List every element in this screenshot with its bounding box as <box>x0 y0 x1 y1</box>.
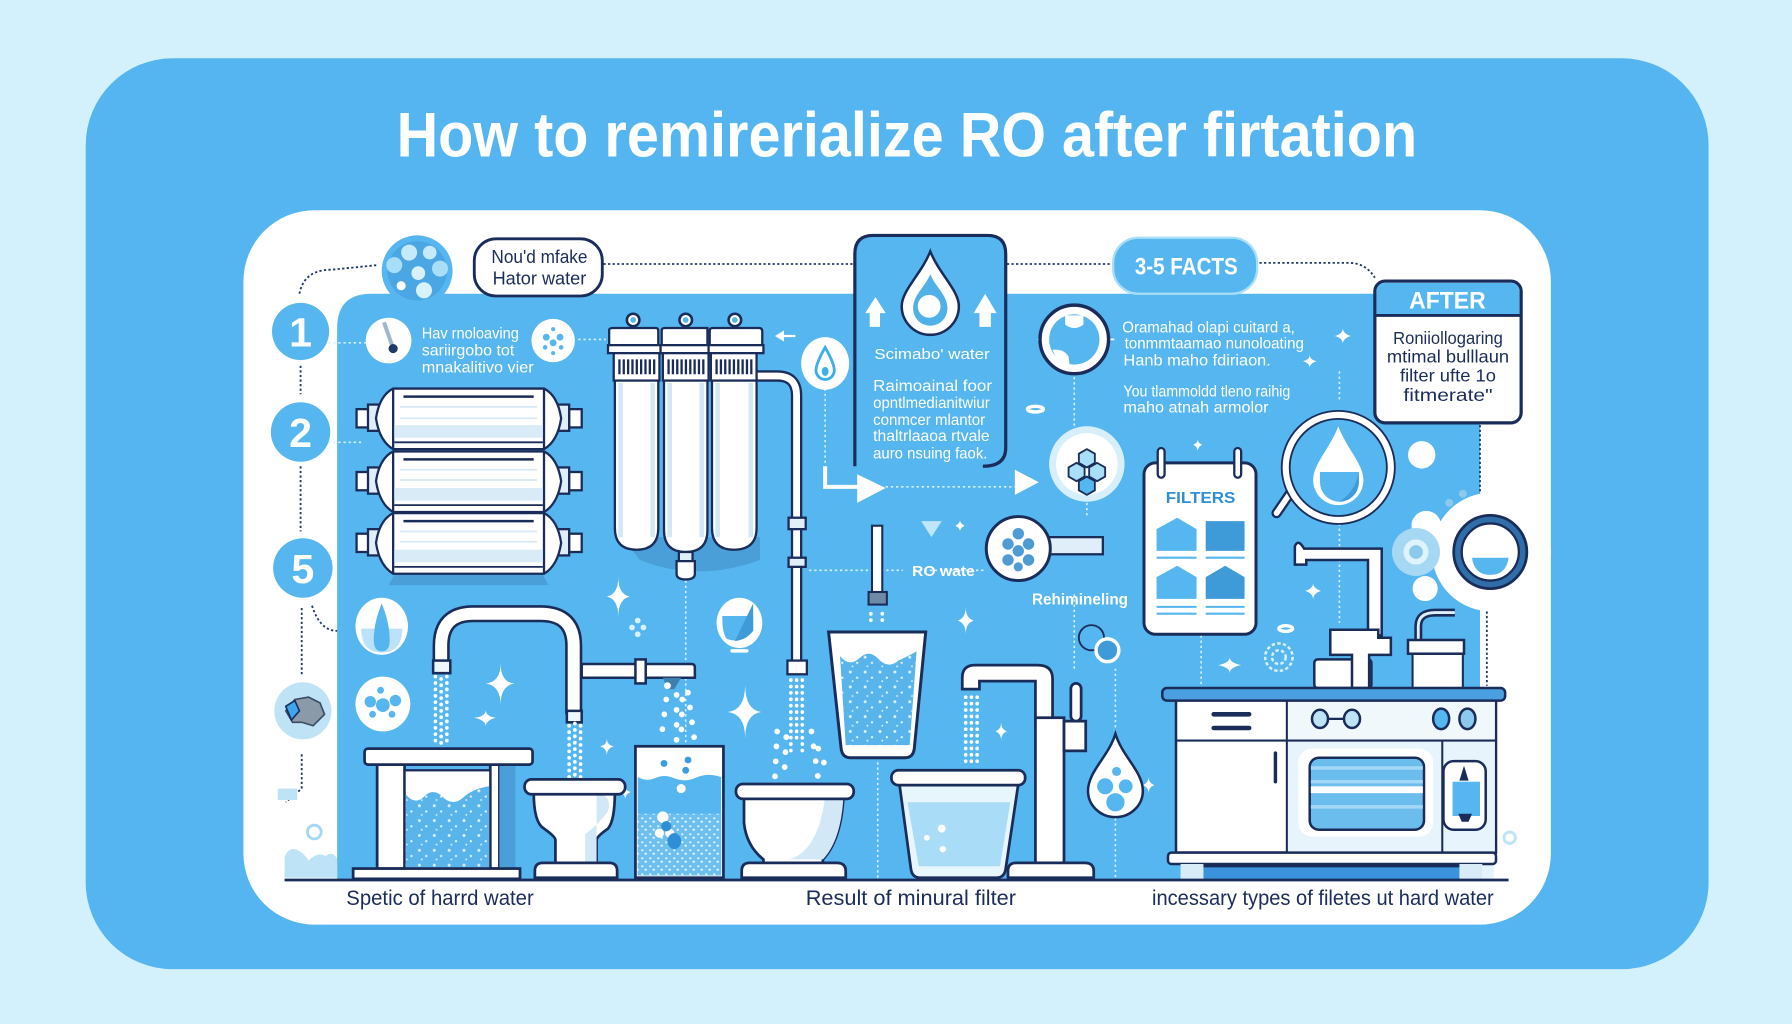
icon: small mineral specks <box>629 618 646 637</box>
captions <box>346 885 1494 910</box>
tall glass with minerals <box>635 746 723 878</box>
basin <box>891 770 1025 878</box>
icon: filter rod circle <box>986 517 1103 581</box>
icon: mineral dots circle <box>531 319 575 362</box>
callout pill: hard water: Nou'd mfake <box>491 246 587 267</box>
panel: remineralised water card: auro nsuing faok. <box>873 445 987 462</box>
text: fact block: Oramahad olapi cuitard a, <box>1122 320 1295 337</box>
misc small tokens <box>1027 406 1293 631</box>
icon: mineral beads <box>1079 625 1119 662</box>
panel: filters clipboard <box>1144 448 1256 634</box>
text: fact block: Hanb maho fdiriaon. <box>1123 353 1271 370</box>
text: intro note <box>422 325 534 377</box>
horizontal filter 3 <box>357 513 582 585</box>
panel: after callout <box>1375 281 1521 423</box>
kitchen jug <box>1408 613 1464 688</box>
label: remineralising: Rehimineling <box>1032 592 1128 609</box>
panel: after callout: AFTER <box>1409 288 1486 315</box>
dotted connector lines <box>286 263 1487 802</box>
faucet: basin mixer <box>962 665 1094 878</box>
pipe from cartridges <box>754 376 807 674</box>
right pale strip <box>1480 702 1494 880</box>
panel: after callout: filter ufte 1o <box>1400 366 1496 386</box>
icon: small tag <box>278 789 297 800</box>
icon: small ring <box>1504 832 1515 843</box>
icon: ring drop <box>307 825 321 839</box>
text: intro note: Hav rnoloaving <box>422 325 519 342</box>
step 1 badge <box>272 303 329 360</box>
step 5 badge <box>273 538 333 598</box>
step 5 badge: 5 <box>291 546 314 592</box>
text: fact block: maho atnah armolor <box>1123 400 1269 417</box>
decoration: corner waves <box>285 849 337 878</box>
icon: drop circle <box>801 337 849 390</box>
icon: mineral drop <box>1088 734 1143 817</box>
icon: glass orb <box>717 598 762 653</box>
icon: gauge bubble cluster <box>1392 441 1551 611</box>
horizontal filter 1 <box>357 389 582 449</box>
panel: remineralised water card: Scimabo' water <box>874 347 990 363</box>
badge: 3-5 facts <box>1113 238 1257 294</box>
panel: filters clipboard: FILTERS <box>1166 490 1236 507</box>
step 2 badge <box>271 402 330 462</box>
white card <box>243 210 1551 925</box>
sparkles <box>474 328 1351 799</box>
text: intro note: mnakalitivo vier <box>422 360 534 377</box>
caption: mineral filter: Result of minural filter <box>806 885 1016 910</box>
step 1 badge: 1 <box>289 309 312 355</box>
callout pill: hard water <box>474 239 602 296</box>
kitchen faucet <box>1295 543 1391 688</box>
title: How to remirerialize RO after firtation <box>397 101 1417 171</box>
panel: after callout: mtimal bulllaun <box>1387 346 1509 366</box>
table with water glass <box>353 749 533 879</box>
arrow: small left arrow <box>777 333 795 339</box>
icon: minerals circle <box>355 677 410 731</box>
toilet one <box>525 779 625 878</box>
panel: after callout: Roniiollogaring <box>1393 328 1503 348</box>
caption: hard water: Spetic of harrd water <box>346 885 534 910</box>
water spray streams <box>435 614 977 794</box>
callout pill: hard water: Hator water <box>493 268 586 289</box>
icon: snowflake mineral <box>1265 643 1293 671</box>
caption: filter types: incessary types of filetes ut hard water <box>1152 885 1494 910</box>
icon: rock mineral <box>274 682 331 739</box>
label: RO water: RO wate <box>912 564 975 580</box>
icon: magnifier with drop <box>1277 411 1395 524</box>
panel: remineralised water card: conmcer mlantor <box>873 412 986 429</box>
kitchen counter and oven <box>1162 688 1505 880</box>
faucet: double arch <box>433 614 695 722</box>
vertical filter cartridges <box>608 314 763 579</box>
toilet two <box>736 784 854 878</box>
glass of water <box>829 632 926 758</box>
panel: remineralised water card: opntlmedianitwiur <box>873 395 990 412</box>
text: fact block: You tlammoldd tleno raihig <box>1123 384 1290 401</box>
panel: remineralised water card <box>855 235 1006 466</box>
panel: remineralised water card: thaltrlaaoa rtvale <box>873 428 990 445</box>
icon: brush circle <box>366 318 411 363</box>
text: intro note: sariirgobo tot <box>422 342 515 359</box>
text: fact block: tonmmtaamao nunoloating <box>1125 336 1304 353</box>
icon: mineral molecule <box>382 235 453 306</box>
panel: remineralised water card: Raimoainal foor <box>873 378 993 395</box>
floor line <box>285 879 1509 881</box>
badge: 3-5 facts: 3-5 FACTS <box>1135 253 1238 280</box>
small pipe nozzle <box>869 526 887 605</box>
step 2 badge: 2 <box>289 410 312 456</box>
icon: ring circle <box>1038 305 1114 374</box>
panel: after callout: fitmerate" <box>1403 385 1493 405</box>
icon: funnel <box>921 521 942 537</box>
arrow: flow to hexagon <box>825 466 1039 503</box>
icon: left drop circle <box>355 598 408 655</box>
icon: hexagon minerals circle <box>1049 426 1125 502</box>
text: fact block <box>1122 320 1304 417</box>
inner blue diagram area <box>337 294 1480 880</box>
horizontal filter 2 <box>357 451 582 512</box>
